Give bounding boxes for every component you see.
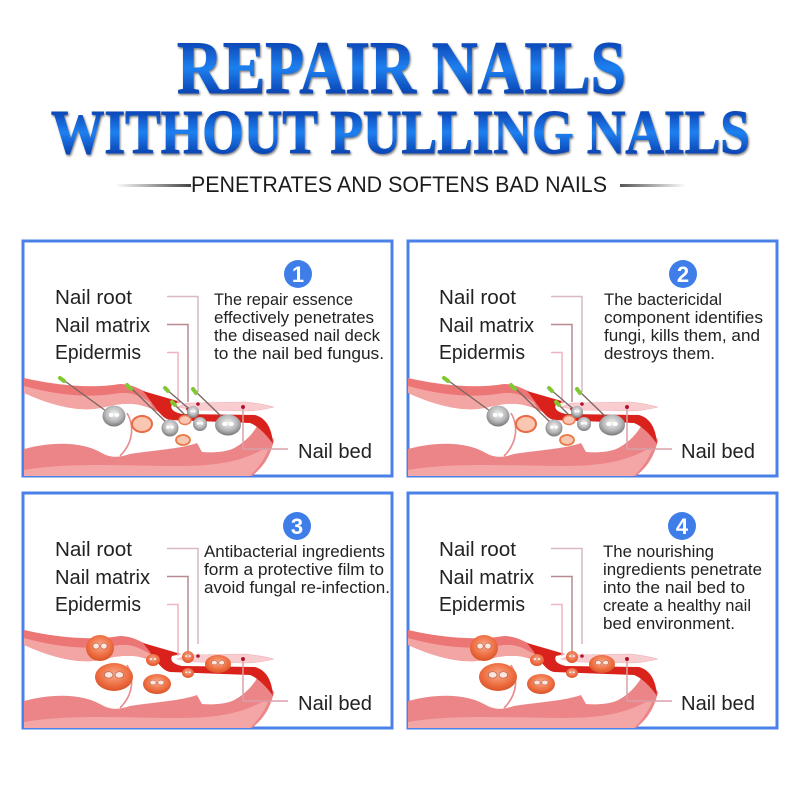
anatomy labels 3: Nail matrix xyxy=(55,567,150,589)
anatomy labels 1: Nail matrix xyxy=(55,315,150,337)
number badge 2 xyxy=(669,260,697,288)
description 3: Antibacterial ingredients xyxy=(204,543,385,561)
description 1 xyxy=(214,291,384,363)
panel: step 1 xyxy=(23,241,392,476)
anatomy labels 2: Nail root xyxy=(439,287,516,309)
number badge 3: 3 xyxy=(291,514,303,539)
anatomy labels 2: Nail matrix xyxy=(439,315,534,337)
description 4 xyxy=(603,543,762,633)
panel: step 3 xyxy=(23,493,392,728)
anatomy labels 2: Nail bed xyxy=(681,441,755,463)
panel: step 2 xyxy=(408,241,777,476)
anatomy labels 1: Epidermis xyxy=(55,342,141,364)
description 3: form a protective film to xyxy=(204,561,384,579)
number badge 4: 4 xyxy=(676,514,689,539)
description 4: into the nail bed to xyxy=(603,579,745,597)
anatomy labels 3: Nail bed xyxy=(298,693,372,715)
description 4: create a healthy nail xyxy=(603,597,751,615)
description 2: fungi, kills them, and xyxy=(604,327,760,345)
number badge 1: 1 xyxy=(292,262,304,287)
subtitle: PENETRATES AND SOFTENS BAD NAILS xyxy=(191,172,607,197)
nail diagram 3 xyxy=(24,548,288,728)
description 3: avoid fungal re-infection. xyxy=(204,579,390,597)
anatomy labels 1: Nail bed xyxy=(298,441,372,463)
anatomy labels 3 xyxy=(55,539,372,715)
description 1: The repair essence xyxy=(214,291,353,309)
description 2: component identifies xyxy=(604,309,763,327)
anatomy labels 3: Epidermis xyxy=(55,594,141,616)
description 4: bed environment. xyxy=(603,615,735,633)
anatomy labels 4: Epidermis xyxy=(439,594,525,616)
description 2: destroys them. xyxy=(604,345,715,363)
nail diagram 1 xyxy=(24,296,288,476)
anatomy labels 4: Nail bed xyxy=(681,693,755,715)
panel: step 4 xyxy=(408,493,777,728)
nail diagram 4 xyxy=(408,548,672,728)
anatomy labels 3: Nail root xyxy=(55,539,132,561)
description 3 xyxy=(204,543,390,597)
anatomy labels 4: Nail root xyxy=(439,539,516,561)
anatomy labels 2: Epidermis xyxy=(439,342,525,364)
number badge 2: 2 xyxy=(677,262,689,287)
title xyxy=(51,27,750,167)
number badge 4 xyxy=(668,512,696,540)
description 2 xyxy=(604,291,763,363)
nail diagram 2 xyxy=(408,296,672,476)
description 4: The nourishing xyxy=(603,543,714,561)
anatomy labels 1: Nail root xyxy=(55,287,132,309)
anatomy labels 2 xyxy=(439,287,755,463)
description 2: The bactericidal xyxy=(604,291,722,309)
description 1: to the nail bed fungus. xyxy=(214,345,384,363)
anatomy labels 4 xyxy=(439,539,755,715)
description 1: the diseased nail deck xyxy=(214,327,381,345)
description 4: ingredients penetrate xyxy=(603,561,762,579)
number badge 3 xyxy=(283,512,311,540)
anatomy labels 1 xyxy=(55,287,372,463)
number badge 1 xyxy=(284,260,312,288)
anatomy labels 4: Nail matrix xyxy=(439,567,534,589)
description 1: effectively penetrates xyxy=(214,309,374,327)
title line 1: REPAIR NAILS xyxy=(177,27,626,110)
